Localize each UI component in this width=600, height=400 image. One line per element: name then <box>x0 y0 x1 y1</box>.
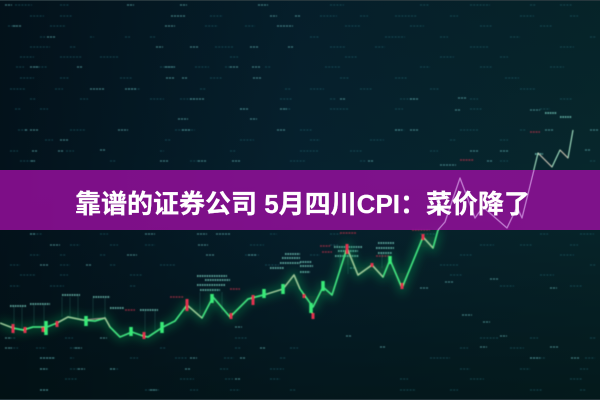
price line: upper section <box>438 130 573 230</box>
purple title band <box>0 170 600 230</box>
chart glow <box>0 230 438 337</box>
candlestick price line <box>0 130 573 339</box>
red candles <box>13 234 423 339</box>
title: 靠谱的证券公司 5月四川CPI：菜价降了 <box>75 189 530 219</box>
price line: green <box>0 230 438 337</box>
green candles <box>46 256 390 336</box>
price line highlights <box>0 150 568 328</box>
